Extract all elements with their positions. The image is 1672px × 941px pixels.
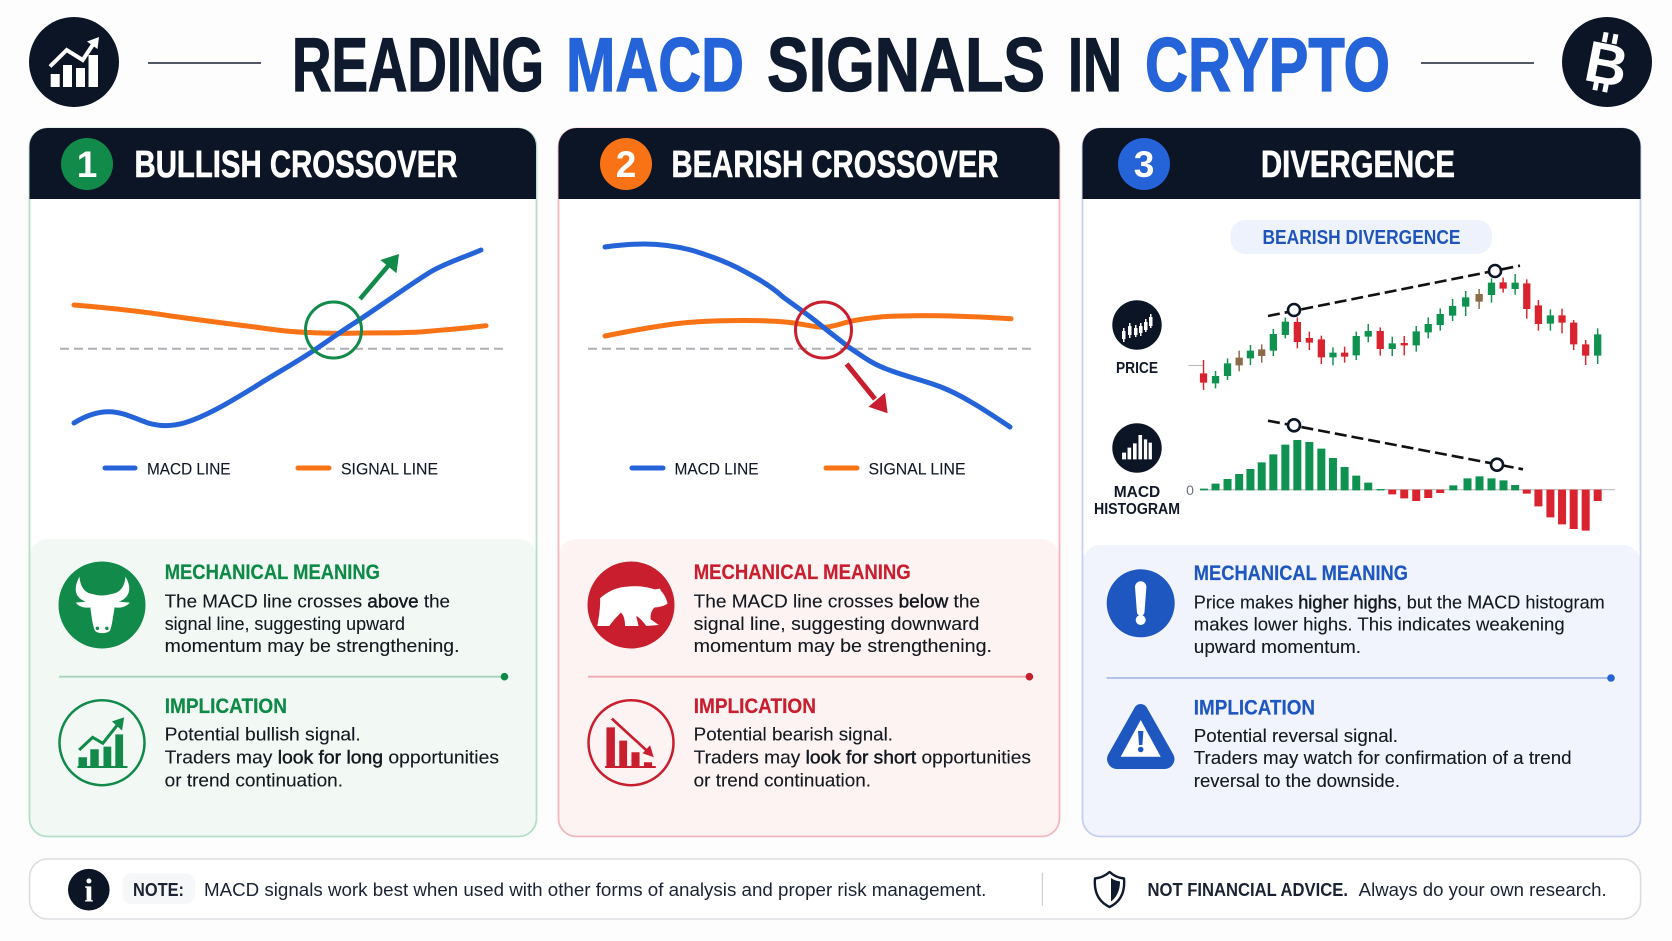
mechanical meaning: bullish: The MACD line crosses above the [165, 591, 450, 612]
implication: bullish: or trend continuation. [165, 770, 343, 791]
disclaimer text: NOT FINANCIAL ADVICE. [1148, 879, 1348, 900]
icon: bear [588, 562, 674, 648]
title: CRYPTO [1145, 23, 1390, 108]
arrow: down [847, 364, 888, 413]
icon: histogram [1112, 423, 1162, 473]
mechanical meaning: divergence: MECHANICAL MEANING [1194, 562, 1408, 585]
icon: bull [58, 562, 146, 648]
implication: divergence: Potential reversal signal. [1194, 725, 1398, 746]
legend: bullish: MACD LINE [147, 460, 230, 478]
legend: bearish: MACD LINE [674, 460, 758, 478]
panel header: bearish: BEARISH CROSSOVER [672, 144, 998, 186]
implication: divergence: reversal to the downside. [1194, 770, 1400, 791]
badge: bearish divergence [1230, 220, 1492, 254]
implication: bearish: Potential bearish signal. [694, 724, 893, 745]
legend: bullish [105, 460, 438, 478]
info box: bearish [558, 539, 1060, 836]
mechanical meaning: bearish: MECHANICAL MEANING [694, 561, 911, 584]
mechanical meaning: divergence: makes lower highs. This indicates weakening [1194, 614, 1565, 635]
disclaimer text: Always do your own research. [1359, 879, 1607, 900]
implication: divergence: Traders may watch for confirmation of a trend [1194, 747, 1572, 768]
icon: info: i [84, 874, 93, 910]
icon: falling chart [588, 700, 674, 785]
chart: macd histogram: 0 [1186, 482, 1194, 498]
implication: bearish: or trend continuation. [694, 770, 871, 791]
title [292, 23, 1390, 108]
panel header: bullish: 1 [77, 144, 97, 185]
label: macd histogram [1094, 484, 1180, 518]
chart: candlestick price [1189, 265, 1601, 390]
mechanical meaning: bearish [694, 561, 992, 656]
info box: bullish [30, 539, 536, 836]
panel header: bullish [30, 128, 536, 199]
mechanical meaning: bearish: The MACD line crosses below the [694, 591, 980, 612]
legend: bearish: SIGNAL LINE [868, 460, 966, 478]
label: price: PRICE [1116, 360, 1158, 377]
implication: bearish: IMPLICATION [694, 695, 816, 718]
badge: bearish divergence: BEARISH DIVERGENCE [1262, 227, 1460, 249]
implication: bullish: IMPLICATION [165, 695, 287, 718]
panel header: divergence: DIVERGENCE [1261, 144, 1455, 186]
implication: bearish: Traders may look for short opportunities [694, 746, 1031, 767]
arrow: up [360, 254, 399, 299]
panel: bearish crossover [558, 128, 1060, 836]
chart: macd histogram [1186, 419, 1615, 531]
legend: bearish [632, 460, 966, 478]
title: READING [292, 23, 544, 108]
icon: chart growth [29, 17, 119, 107]
label: macd histogram: MACD [1114, 484, 1160, 501]
implication: bullish [165, 695, 499, 791]
icon: info [68, 869, 110, 910]
panel header: divergence: 3 [1134, 144, 1154, 185]
note text: NOTE: [133, 879, 184, 900]
implication: bullish: Potential bullish signal. [165, 724, 361, 745]
implication: bullish: Traders may look for long opportunities [165, 746, 499, 767]
mechanical meaning: divergence: Price makes higher highs, but the MACD histogram [1194, 592, 1605, 613]
implication: bearish [694, 695, 1031, 791]
mechanical meaning: bullish [165, 561, 459, 656]
panel: divergence [1082, 128, 1640, 836]
footer note bar [30, 859, 1641, 919]
title: MACD [566, 23, 744, 108]
mechanical meaning: bullish: MECHANICAL MEANING [165, 561, 380, 584]
info box: divergence [1082, 545, 1640, 836]
panel header: bearish: 2 [616, 144, 636, 185]
legend: bullish: SIGNAL LINE [341, 460, 438, 478]
implication: divergence [1194, 696, 1572, 791]
panel header: bullish: BULLISH CROSSOVER [134, 144, 458, 186]
mechanical meaning: bearish: momentum may be strengthening. [694, 635, 992, 656]
title: SIGNALS [767, 23, 1045, 108]
title: IN [1068, 23, 1122, 108]
icon: warning triangle [1114, 711, 1167, 762]
header [29, 17, 1652, 108]
chart: bearish crossover [588, 244, 1033, 478]
mechanical meaning: divergence [1194, 562, 1605, 657]
panel: bullish crossover [30, 128, 536, 836]
label: macd histogram: HISTOGRAM [1094, 501, 1180, 518]
mechanical meaning: divergence: upward momentum. [1194, 636, 1361, 657]
icon: price [1112, 300, 1162, 350]
panel header: divergence [1082, 128, 1640, 199]
note text: MACD signals work best when used with other forms of analysis and proper risk management. [204, 879, 986, 900]
icon: bitcoin: B [1580, 29, 1633, 100]
icon: exclamation [1107, 569, 1175, 637]
icon: shield [1095, 872, 1124, 907]
mechanical meaning: bearish: signal line, suggesting downward [694, 613, 979, 634]
mechanical meaning: bullish: momentum may be strengthening. [165, 635, 459, 656]
panel header: bearish [558, 128, 1060, 199]
icon: rising chart [60, 700, 144, 785]
disclaimer text [1148, 879, 1607, 900]
chart: bullish crossover [60, 250, 507, 478]
mechanical meaning: bullish: signal line, suggesting upward [165, 613, 405, 634]
implication: divergence: IMPLICATION [1194, 696, 1315, 719]
icon: bitcoin [1562, 17, 1652, 107]
